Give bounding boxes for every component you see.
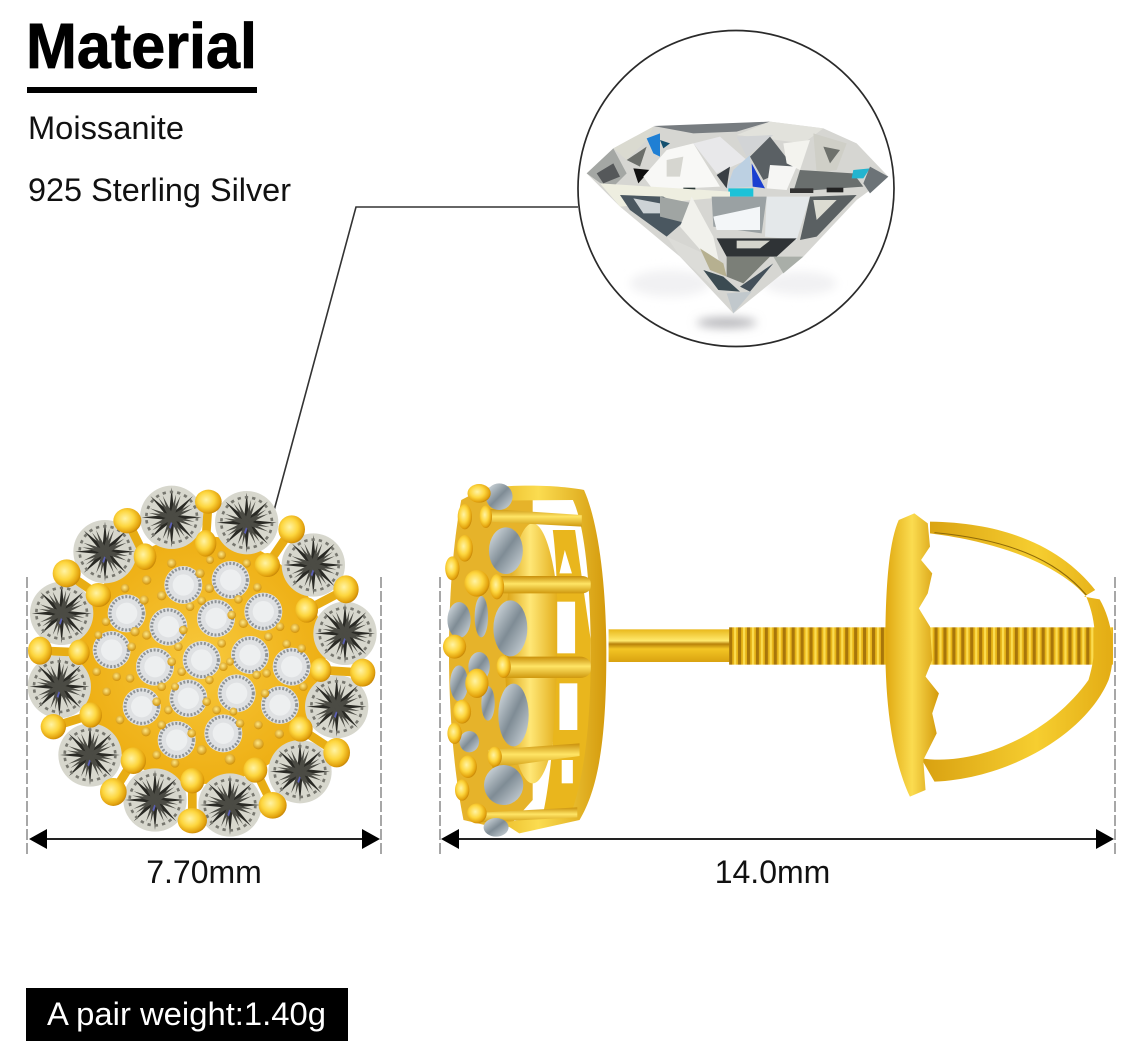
front view earring bbox=[28, 486, 377, 837]
dimension: front width bbox=[27, 577, 381, 890]
inner stones bbox=[93, 561, 311, 759]
threaded post bbox=[609, 627, 1113, 665]
left prongs bbox=[443, 484, 511, 823]
weight label bbox=[26, 988, 348, 1041]
gold base disc bbox=[78, 536, 326, 784]
material list bbox=[28, 110, 291, 208]
prong bars bbox=[468, 508, 591, 823]
large gold prongs bbox=[28, 490, 375, 833]
outer moissanite stones bbox=[28, 486, 377, 837]
side view earring bbox=[443, 483, 1113, 837]
prong arms bbox=[40, 502, 363, 821]
dimension: side length: 14.0mm bbox=[715, 854, 830, 890]
dimension: side length bbox=[440, 577, 1115, 890]
material list: Moissanite bbox=[28, 110, 184, 146]
side stones bbox=[447, 483, 529, 837]
material list: 925 Sterling Silver bbox=[28, 172, 291, 208]
icon: cut diamond bbox=[587, 122, 888, 328]
screw back bbox=[885, 513, 1113, 797]
dimension: front width: 7.70mm bbox=[146, 854, 262, 890]
small gold beads bbox=[92, 551, 308, 768]
weight label: A pair weight:1.40g bbox=[47, 996, 326, 1032]
leader line bbox=[272, 207, 578, 518]
callout: moissanite diamond in circle bbox=[578, 30, 894, 346]
earring head bbox=[443, 483, 606, 837]
title: Material bbox=[26, 10, 257, 82]
